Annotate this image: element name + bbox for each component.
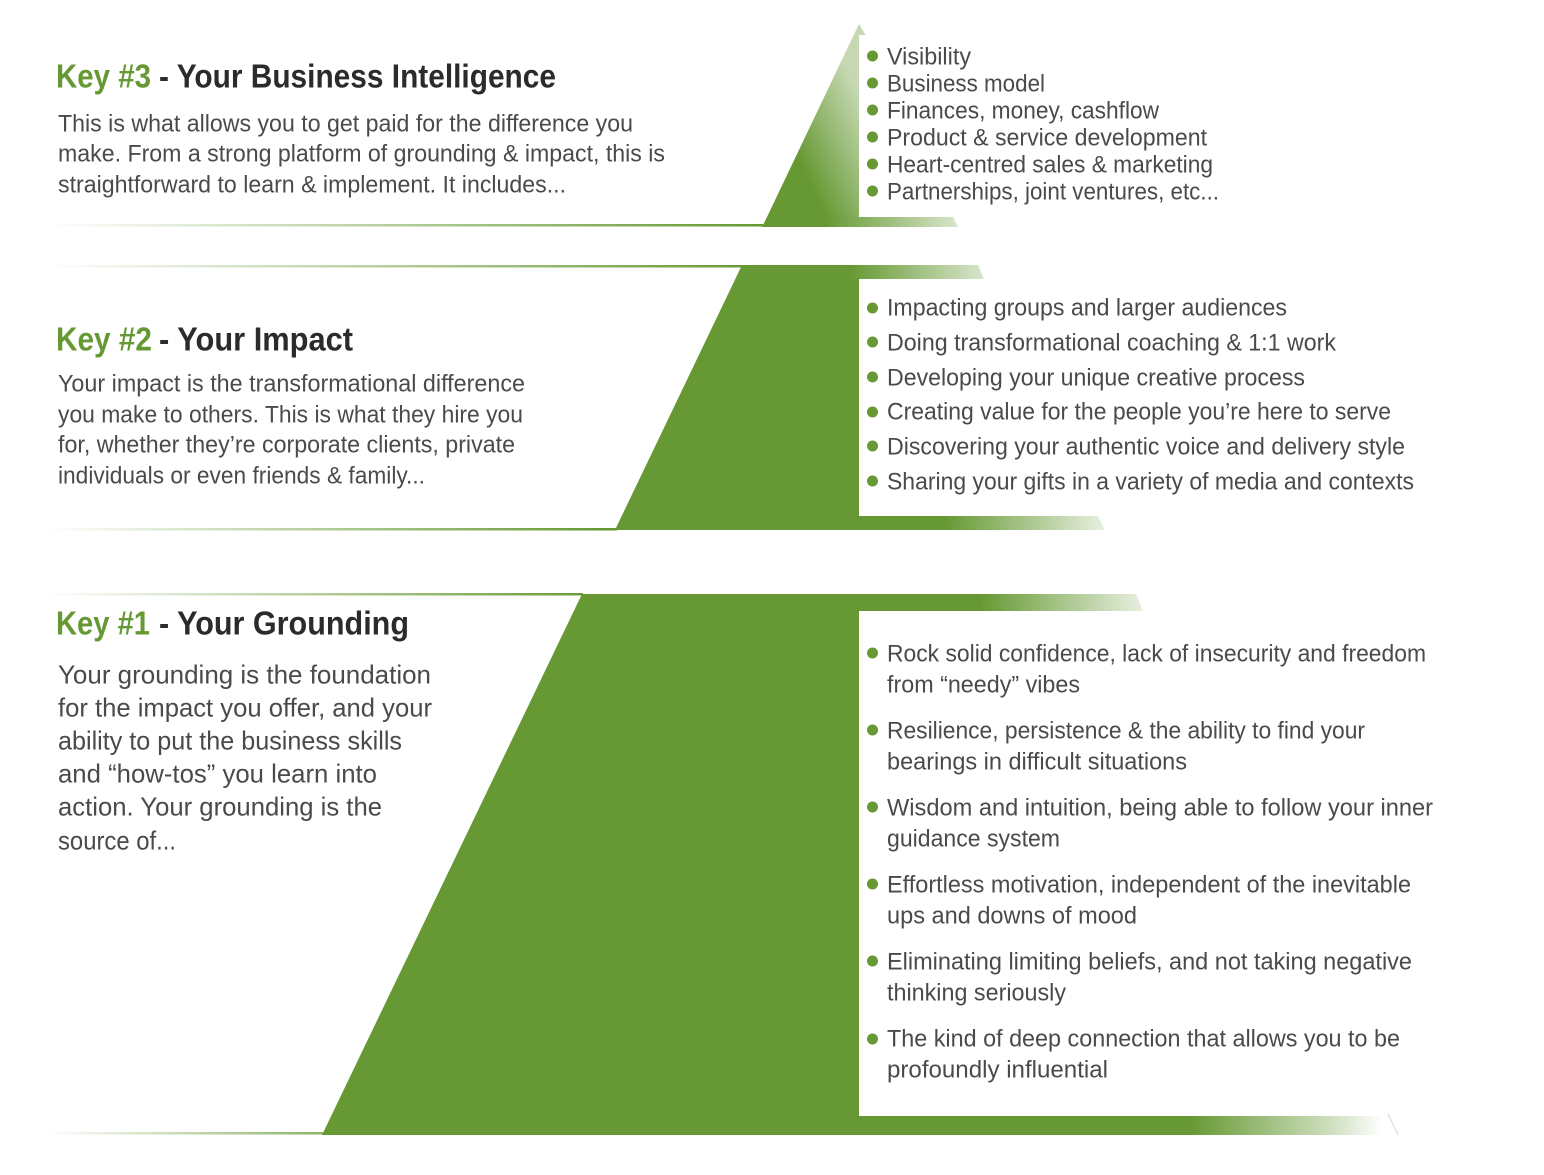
list: key 1 items: Rock solid confidence, lack of insecurity and freedom [887, 640, 1426, 667]
list: key 3 items: Business model [887, 70, 1045, 97]
list: key 3 items: Finances, money, cashflow [887, 97, 1160, 124]
list: key 1 items: profoundly influential [887, 1056, 1108, 1083]
heading: key 1: - Your Grounding [159, 604, 409, 641]
heading: key 3: Key #3 [56, 57, 151, 94]
text block: key 3 description: This is what allows you to get paid for the difference you [58, 110, 633, 137]
list: key 2 items: Creating value for the people you’re here to serve [887, 398, 1391, 425]
panel: key 3 pyramid tier [45, 24, 958, 227]
list: key 3 items: Partnerships, joint ventures, etc... [887, 178, 1219, 205]
list: key 3 items: Product & service development [887, 124, 1207, 151]
heading: key 3: - Your Business Intelligence [159, 57, 556, 94]
list: key 1 items: from “needy” vibes [887, 671, 1080, 698]
list: key 2 items: Impacting groups and larger audiences [887, 294, 1287, 321]
text block: key 2 description [58, 370, 525, 489]
list: key 1 items: Wisdom and intuition, being able to follow your inner [887, 794, 1433, 821]
text block: key 1 description: action. Your grounding is the [58, 791, 382, 821]
heading: key 1: Key #1 [56, 604, 150, 641]
list: key 3 items [867, 43, 1219, 205]
text block: key 1 description: source of... [58, 825, 176, 855]
list: key 2 items: Discovering your authentic voice and delivery style [887, 433, 1405, 460]
panel: key 1 pyramid tier [45, 593, 1398, 1135]
text block: key 2 description: individuals or even friends & family... [58, 462, 425, 489]
text block: key 1 description [58, 659, 432, 855]
text block: key 2 description: Your impact is the transformational difference [58, 370, 525, 397]
heading: key 1 [56, 604, 409, 641]
text block: key 2 description: for, whether they’re corporate clients, private [58, 431, 515, 458]
list: key 1 items: guidance system [887, 825, 1060, 852]
list: key 2 items [867, 294, 1414, 495]
list: key 1 items: Effortless motivation, independent of the inevitable [887, 871, 1411, 898]
list: key 2 items: Sharing your gifts in a variety of media and contexts [887, 468, 1414, 495]
list: key 2 items: Developing your unique creative process [887, 364, 1305, 391]
list: key 1 items: thinking seriously [887, 979, 1066, 1006]
text block: key 3 description: straightforward to learn & implement. It includes... [58, 171, 566, 198]
list: key 1 items: ups and downs of mood [887, 902, 1137, 929]
text block: key 1 description: for the impact you offer, and your [58, 692, 432, 722]
list: key 1 items: Resilience, persistence & the ability to find your [887, 717, 1365, 744]
list: key 2 items: Doing transformational coaching & 1:1 work [887, 329, 1337, 356]
text block: key 1 description: Your grounding is the foundation [58, 659, 431, 689]
list: key 1 items [867, 640, 1433, 1083]
panel: key 2 pyramid tier [45, 265, 1105, 530]
text block: key 2 description: you make to others. This is what they hire you [58, 401, 523, 428]
list: key 3 items: Visibility [887, 43, 971, 70]
heading: key 2 [56, 320, 353, 357]
list: key 3 items: Heart-centred sales & marketing [887, 151, 1213, 178]
text block: key 1 description: and “how-tos” you learn into [58, 758, 377, 788]
list: key 1 items: The kind of deep connection that allows you to be [887, 1025, 1400, 1052]
text block: key 1 description: ability to put the business skills [58, 725, 402, 755]
heading: key 2: - Your Impact [159, 320, 353, 357]
heading: key 2: Key #2 [56, 320, 152, 357]
list: key 1 items: bearings in difficult situations [887, 748, 1187, 775]
text block: key 3 description [58, 110, 665, 198]
list: key 1 items: Eliminating limiting beliefs, and not taking negative [887, 948, 1412, 975]
text block: key 3 description: make. From a strong platform of grounding & impact, this is [58, 140, 665, 167]
